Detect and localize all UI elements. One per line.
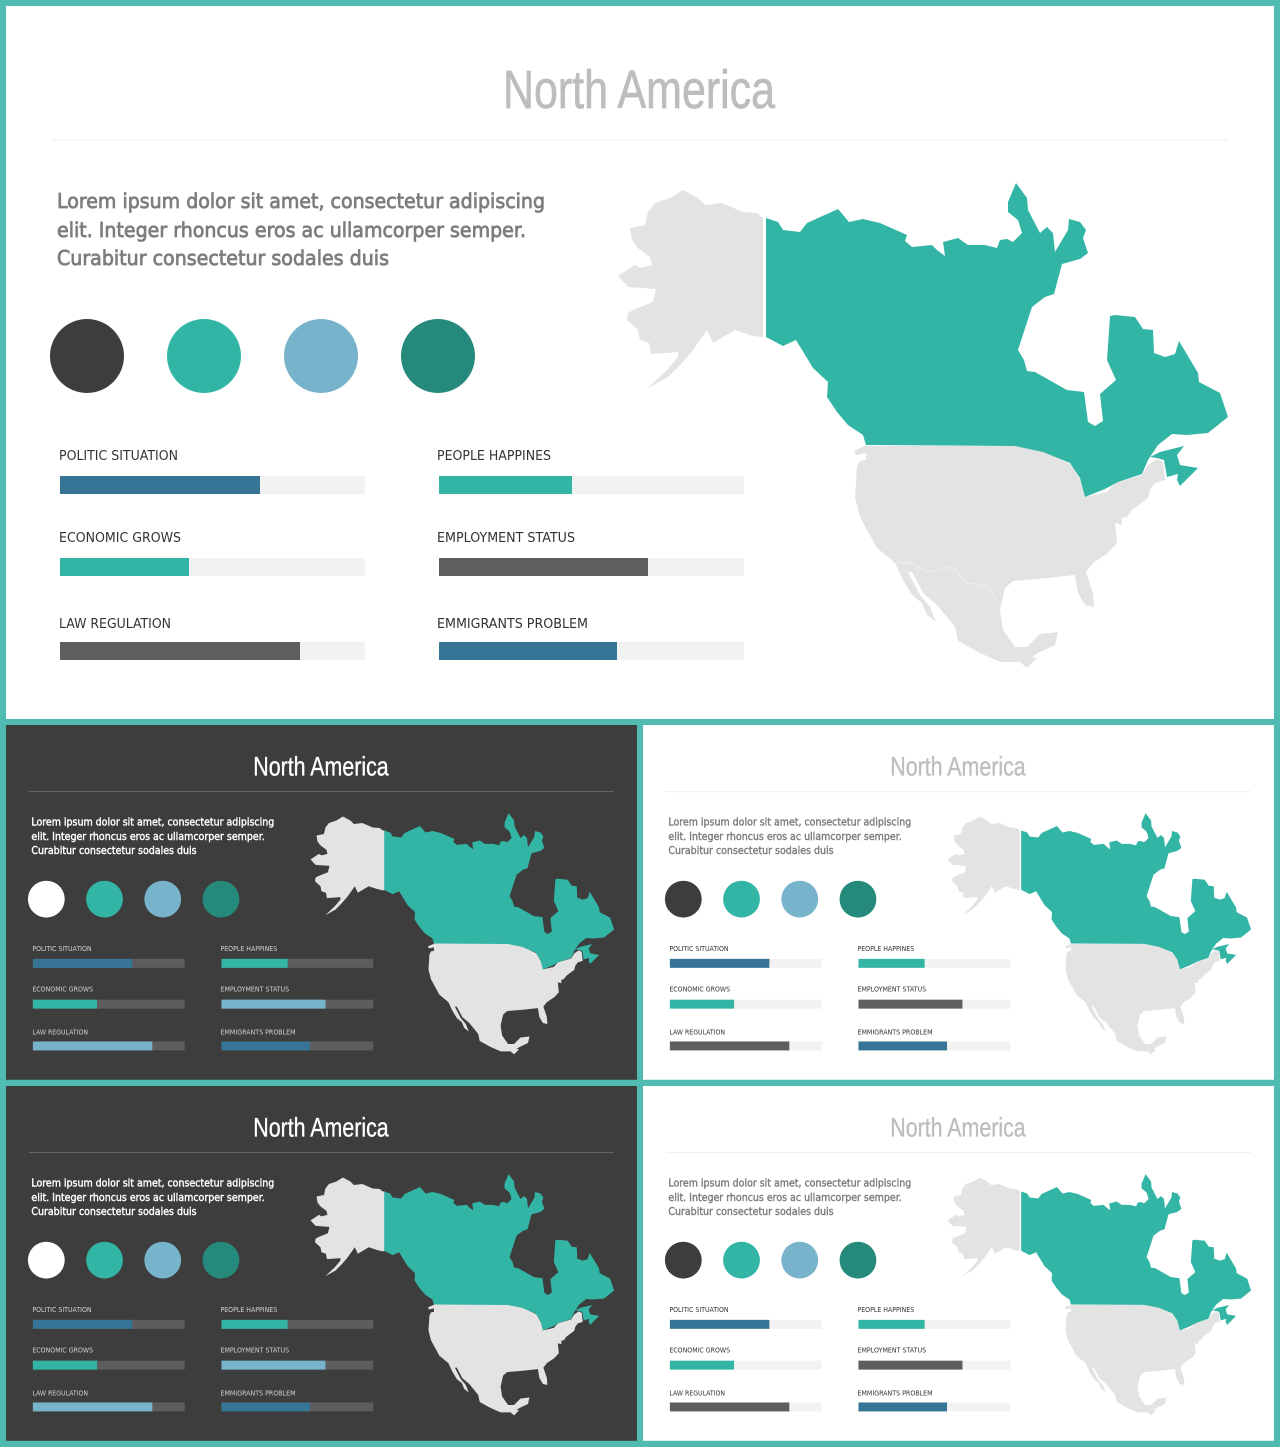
colour legend circles xyxy=(28,881,239,918)
intro text: elit. Integer rhoncus eros ac ullamcorper semper. xyxy=(57,218,526,242)
progress bars: EMPLOYMENT STATUS xyxy=(857,986,926,994)
title: North America xyxy=(253,752,389,782)
intro text: Lorem ipsum dolor sit amet, consectetur adipiscing xyxy=(668,818,911,829)
progress bars xyxy=(59,448,744,660)
progress bars xyxy=(32,1306,373,1411)
colour legend circles xyxy=(28,1242,239,1279)
title: North America xyxy=(253,1113,389,1143)
map of North America xyxy=(948,813,1251,1054)
colour legend circles xyxy=(50,319,475,393)
panel: small light slide top xyxy=(643,725,1274,1080)
progress bars: EMMIGRANTS PROBLEM xyxy=(220,1029,296,1037)
progress bars: LAW REGULATION xyxy=(32,1029,88,1037)
progress bars: ECONOMIC GROWS xyxy=(59,530,181,546)
intro text xyxy=(31,818,274,857)
panel: small light slide bottom xyxy=(643,1086,1274,1441)
progress bars: EMPLOYMENT STATUS xyxy=(857,1347,926,1355)
intro text xyxy=(31,1179,274,1218)
intro text: Lorem ipsum dolor sit amet, consectetur adipiscing xyxy=(31,818,274,829)
panel: small dark slide bottom xyxy=(6,1086,637,1441)
intro text xyxy=(668,1179,911,1218)
intro text: Curabitur consectetur sodales duis xyxy=(57,246,389,270)
map of North America xyxy=(618,183,1228,668)
intro text: Lorem ipsum dolor sit amet, consectetur adipiscing xyxy=(57,189,545,213)
progress bars: ECONOMIC GROWS xyxy=(32,986,93,994)
colour legend circles xyxy=(665,1242,876,1279)
progress bars: EMMIGRANTS PROBLEM xyxy=(857,1390,933,1398)
intro text: Lorem ipsum dolor sit amet, consectetur adipiscing xyxy=(668,1179,911,1190)
progress bars xyxy=(32,945,373,1050)
progress bars: POLITIC SITUATION xyxy=(32,945,92,953)
progress bars: ECONOMIC GROWS xyxy=(669,1347,730,1355)
progress bars: EMPLOYMENT STATUS xyxy=(220,1347,289,1355)
progress bars: ECONOMIC GROWS xyxy=(669,986,730,994)
intro text: elit. Integer rhoncus eros ac ullamcorper semper. xyxy=(31,1193,265,1204)
progress bars: LAW REGULATION xyxy=(669,1029,725,1037)
progress bars: PEOPLE HAPPINES xyxy=(857,945,914,953)
progress bars: EMMIGRANTS PROBLEM xyxy=(857,1029,933,1037)
progress bars: POLITIC SITUATION xyxy=(32,1306,92,1314)
progress bars: PEOPLE HAPPINES xyxy=(220,945,277,953)
map of North America xyxy=(311,813,614,1054)
map of North America xyxy=(948,1174,1251,1415)
progress bars: PEOPLE HAPPINES xyxy=(437,448,551,464)
progress bars: LAW REGULATION xyxy=(669,1390,725,1398)
progress bars: POLITIC SITUATION xyxy=(669,1306,729,1314)
progress bars: EMPLOYMENT STATUS xyxy=(220,986,289,994)
intro text xyxy=(57,189,545,270)
intro text: elit. Integer rhoncus eros ac ullamcorper semper. xyxy=(668,832,902,843)
progress bars: ECONOMIC GROWS xyxy=(32,1347,93,1355)
title: North America xyxy=(890,752,1026,782)
colour legend circles xyxy=(665,881,876,918)
progress bars: POLITIC SITUATION xyxy=(669,945,729,953)
progress bars: PEOPLE HAPPINES xyxy=(857,1306,914,1314)
intro text: elit. Integer rhoncus eros ac ullamcorper semper. xyxy=(31,832,265,843)
title: North America xyxy=(890,1113,1026,1143)
progress bars: EMMIGRANTS PROBLEM xyxy=(437,616,588,632)
progress bars: LAW REGULATION xyxy=(59,616,171,632)
intro text: Curabitur consectetur sodales duis xyxy=(31,1207,197,1218)
intro text xyxy=(668,818,911,857)
progress bars: EMPLOYMENT STATUS xyxy=(437,530,575,546)
progress bars xyxy=(669,1306,1010,1411)
progress bars: POLITIC SITUATION xyxy=(59,448,178,464)
intro text: Curabitur consectetur sodales duis xyxy=(668,1207,834,1218)
progress bars: PEOPLE HAPPINES xyxy=(220,1306,277,1314)
progress bars xyxy=(669,945,1010,1050)
panel: small dark slide top xyxy=(6,725,637,1080)
intro text: elit. Integer rhoncus eros ac ullamcorper semper. xyxy=(668,1193,902,1204)
map of North America xyxy=(311,1174,614,1415)
intro text: Lorem ipsum dolor sit amet, consectetur adipiscing xyxy=(31,1179,274,1190)
progress bars: EMMIGRANTS PROBLEM xyxy=(220,1390,296,1398)
intro text: Curabitur consectetur sodales duis xyxy=(31,846,197,857)
title: North America xyxy=(503,60,776,120)
progress bars: LAW REGULATION xyxy=(32,1390,88,1398)
intro text: Curabitur consectetur sodales duis xyxy=(668,846,834,857)
panel: main light slide xyxy=(6,6,1274,719)
